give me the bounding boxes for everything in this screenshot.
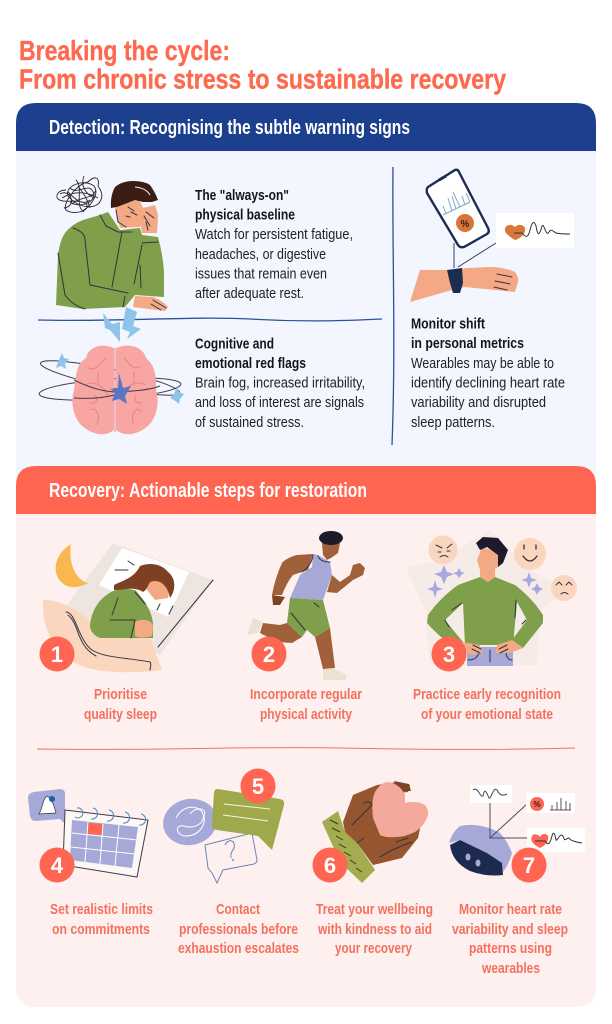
label 5 <box>178 901 299 957</box>
label 7: variability and sleep <box>452 921 568 938</box>
icon: brain with lightning <box>38 307 184 434</box>
label 1 <box>84 686 157 723</box>
detection heading bar <box>16 103 596 151</box>
icon: runner <box>247 531 365 680</box>
step 4: limits <box>28 789 153 938</box>
label 6: your recovery <box>335 940 413 957</box>
label 6: Treat your wellbeing <box>316 901 433 918</box>
icon: phone and wearable on wrist <box>410 170 574 302</box>
text: cognitive red flags: of sustained stress. <box>195 414 304 431</box>
icon: phone and wearable on wrist: % <box>461 219 470 230</box>
badge 4 <box>40 848 74 882</box>
icon: hands holding heart <box>322 781 428 883</box>
label 4 <box>50 901 153 938</box>
step 1: sleep <box>40 543 213 723</box>
icon: smart ring with metrics <box>449 785 585 876</box>
badge 6 <box>312 848 348 882</box>
label 2: Incorporate regular <box>250 686 362 703</box>
text: personal metrics: variability and disrupted <box>411 394 546 411</box>
label 5: Contact <box>216 901 260 918</box>
text: cognitive red flags: Brain fog, increased irritability, <box>195 374 365 392</box>
text: physical baseline: headaches, or digestive <box>195 246 326 263</box>
text: physical baseline: after adequate rest. <box>195 285 304 302</box>
step 6: kindness <box>312 781 433 957</box>
badge 1: 1 <box>51 642 63 667</box>
label 6: with kindness to aid <box>317 921 432 938</box>
text: personal metrics: Wearables may be able to <box>411 355 554 372</box>
text: personal metrics: sleep patterns. <box>411 414 495 431</box>
text: physical baseline: physical baseline <box>195 206 295 224</box>
detection heading bar: Detection: Recognising the subtle warning signs <box>49 117 410 139</box>
step 3: emotional state <box>406 530 577 723</box>
badge 5 <box>240 768 276 804</box>
icon: calendar and bell <box>28 789 148 877</box>
label 7 <box>452 901 568 977</box>
label 1: Prioritise <box>94 686 147 703</box>
badge 6: 6 <box>324 853 336 878</box>
step 7: wearables <box>449 785 585 977</box>
label 4: on commitments <box>52 921 150 938</box>
label 7: Monitor heart rate <box>459 901 562 918</box>
label 3: of your emotional state <box>421 706 553 723</box>
title <box>19 35 506 94</box>
recovery heading bar <box>16 466 596 514</box>
badge 1 <box>40 636 74 672</box>
label 2: physical activity <box>260 706 353 723</box>
panel: recovery <box>16 466 596 1007</box>
badge 3 <box>432 636 466 672</box>
text: cognitive red flags: Cognitive and <box>195 336 274 352</box>
icon: speech bubbles <box>159 789 284 883</box>
badge 7 <box>512 848 546 882</box>
recovery heading bar: Recovery: Actionable steps for restoration <box>49 480 367 502</box>
badge 7: 7 <box>523 853 535 878</box>
step 2: activity <box>247 531 365 723</box>
badge 2: 2 <box>263 642 275 667</box>
label 2 <box>250 686 362 723</box>
panel: detection <box>16 103 596 490</box>
label 7: wearables <box>481 960 540 977</box>
text: personal metrics: in personal metrics <box>411 335 524 352</box>
title: From chronic stress to sustainable recovery <box>19 64 506 94</box>
text: personal metrics <box>411 316 565 431</box>
text: physical baseline: Watch for persistent fatigue, <box>195 226 353 243</box>
icon: sleeping woman <box>43 543 213 672</box>
label 3: Practice early recognition <box>413 686 561 703</box>
badge 3: 3 <box>443 642 455 667</box>
label 7: patterns using <box>469 940 552 957</box>
text: cognitive red flags <box>195 336 365 431</box>
text: physical baseline <box>195 187 353 302</box>
text: personal metrics: Monitor shift <box>411 316 485 332</box>
icon: tired man with scribble <box>56 176 168 311</box>
label 4: Set realistic limits <box>50 901 153 918</box>
badge 4: 4 <box>51 853 64 878</box>
text: cognitive red flags: and loss of interest are signals <box>195 394 364 411</box>
text: personal metrics: identify declining heart rate <box>411 374 565 392</box>
text: physical baseline: The "always-on" <box>195 187 289 204</box>
text: cognitive red flags: emotional red flags <box>195 355 306 372</box>
label 5: professionals before <box>179 921 298 938</box>
text: physical baseline: issues that remain even <box>195 266 327 282</box>
title: Breaking the cycle: <box>19 35 230 66</box>
label 3 <box>413 686 561 723</box>
icon: smart ring with metrics: % <box>533 800 541 809</box>
label 6 <box>316 901 433 957</box>
icon: man with emotion faces <box>406 530 577 666</box>
label 5: exhaustion escalates <box>178 940 299 957</box>
badge 5: 5 <box>252 774 264 799</box>
badge 2 <box>252 636 286 672</box>
label 1: quality sleep <box>84 706 157 723</box>
step 5: contact professionals <box>159 768 299 957</box>
